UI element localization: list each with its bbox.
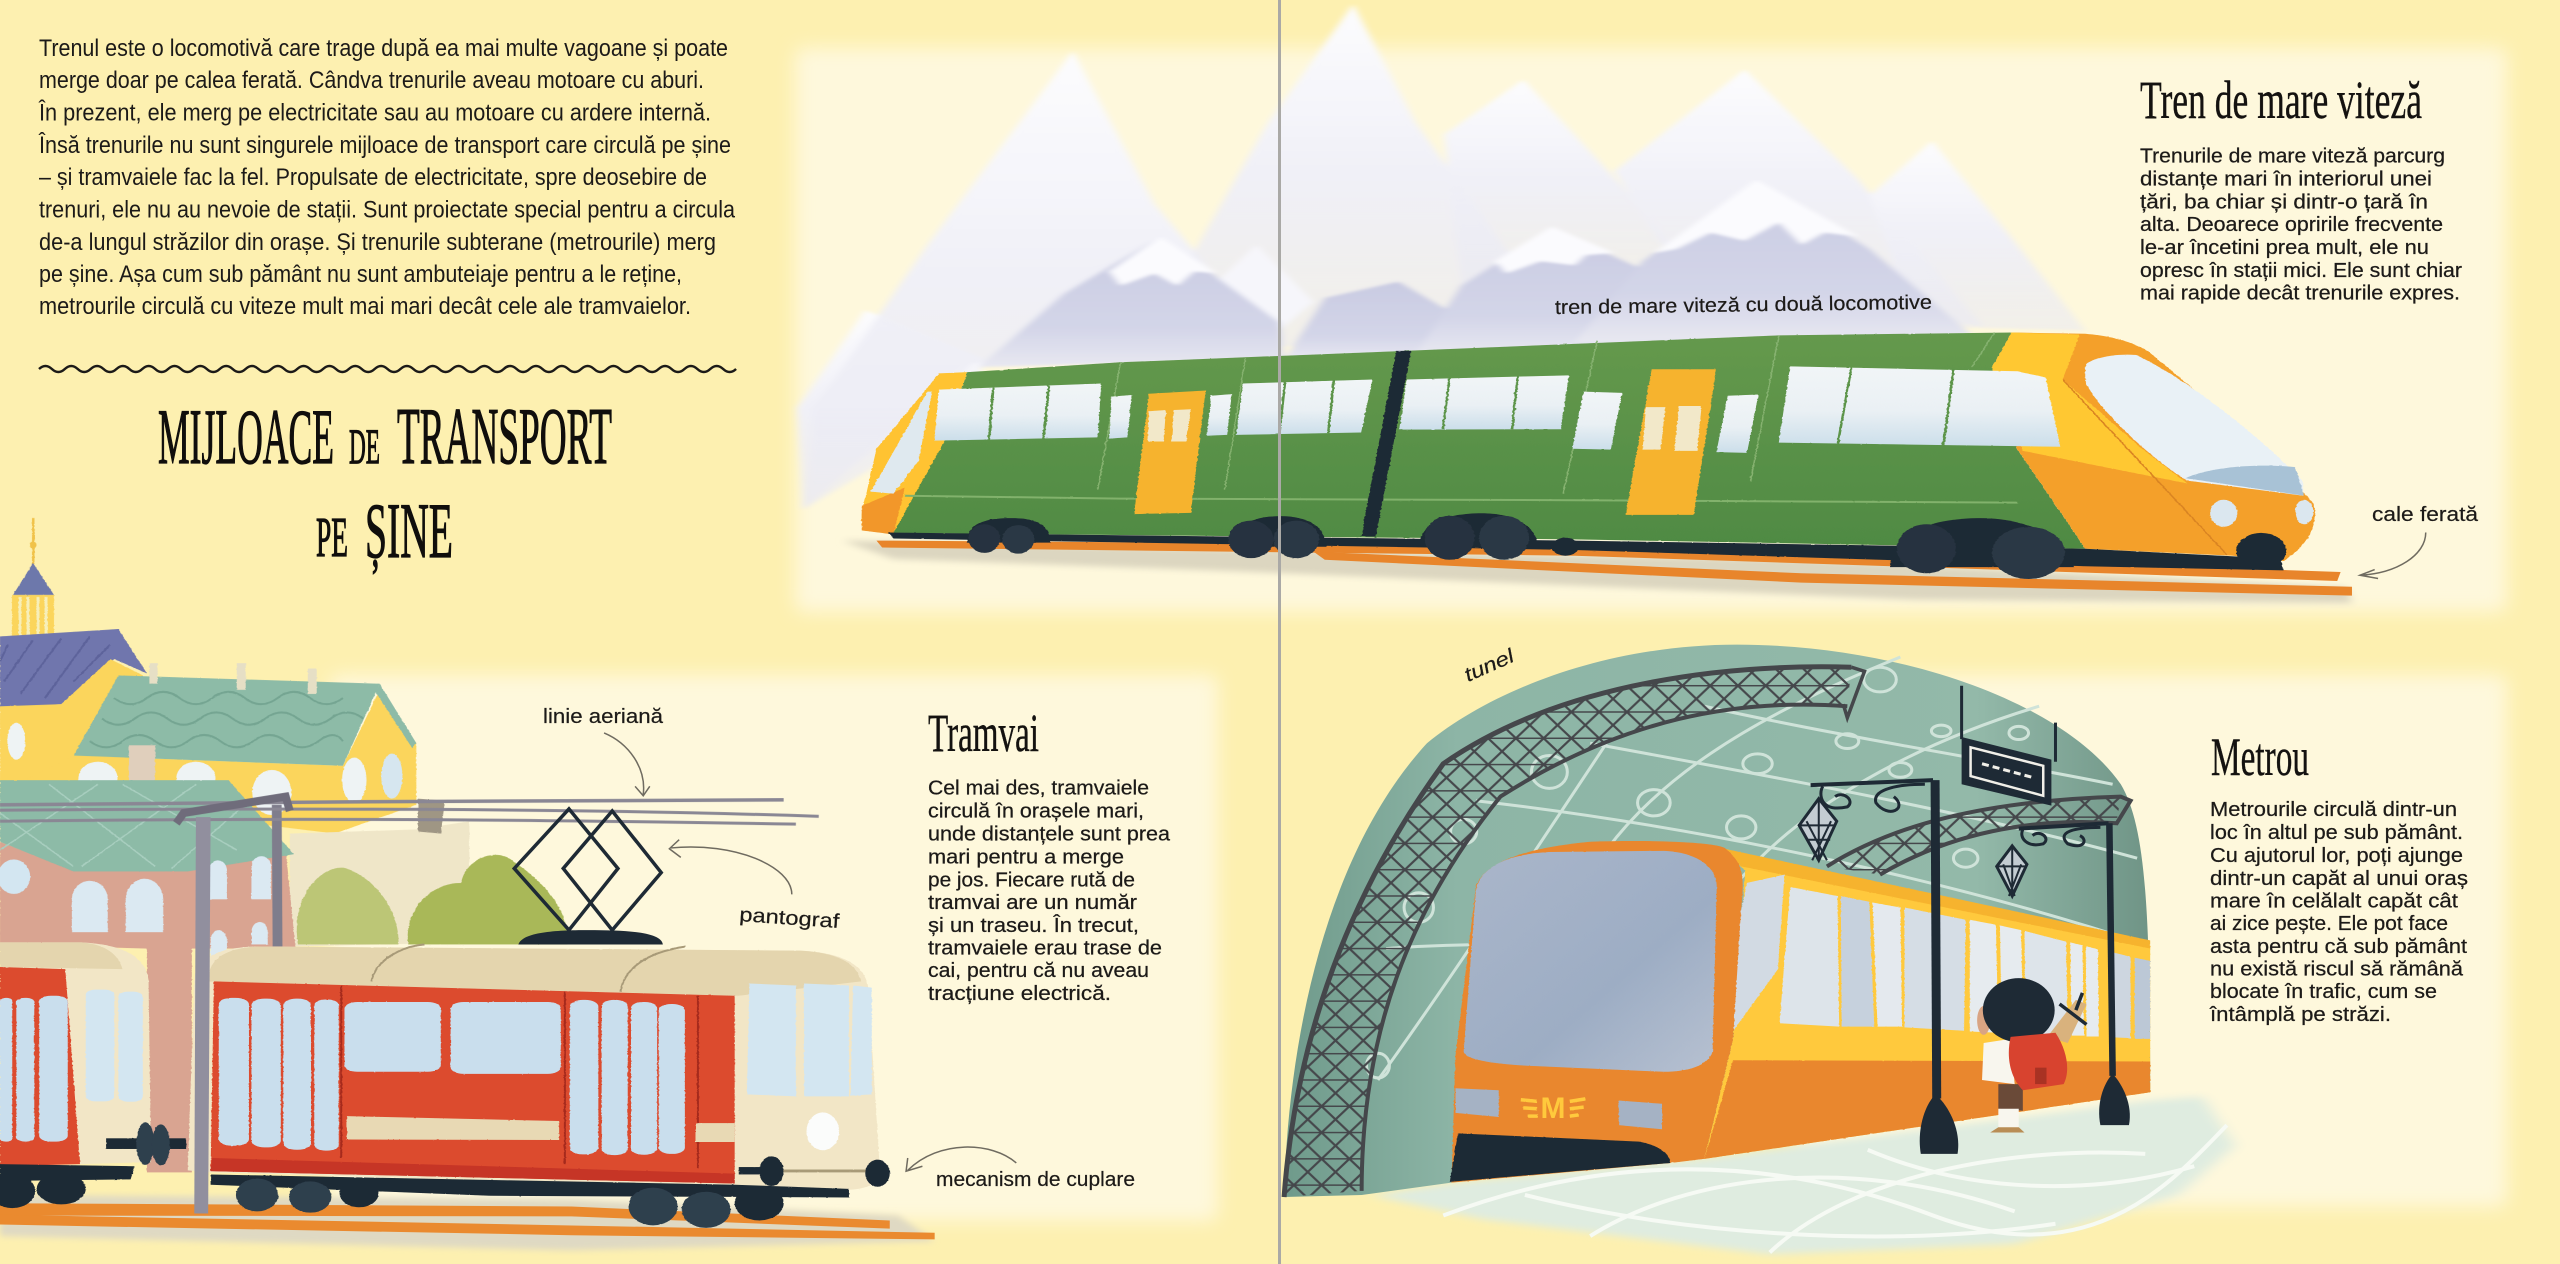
chimneys bbox=[149, 663, 158, 684]
intro text: pe șine. Așa cum sub pământ nu sunt ambuteiaje pentru a le reține, bbox=[39, 261, 682, 288]
label: railway: cale ferată bbox=[2372, 504, 2479, 526]
text: high speed train: Trenurile de mare viteză parcurg bbox=[2140, 146, 2445, 168]
text: high speed train: țări, ba chiar și dintr-o țară în bbox=[2140, 192, 2428, 214]
metro logo: M bbox=[1540, 1092, 1566, 1125]
title: DE bbox=[349, 418, 380, 474]
tunnel bbox=[1284, 645, 2150, 1197]
text: high speed train: distanțe mari în interiorul unei bbox=[2140, 168, 2432, 190]
label: pantograph: pantograf bbox=[739, 904, 840, 933]
ground and rails bbox=[0, 1195, 935, 1250]
tower bbox=[12, 518, 54, 643]
train body bbox=[862, 333, 2315, 579]
text: metro: blocate în trafic, cum se bbox=[2210, 981, 2437, 1003]
doors bbox=[1134, 390, 1206, 514]
label: two locomotive train: tren de mare viteză cu două locomotive bbox=[1555, 292, 1932, 319]
text: tram bbox=[928, 778, 1171, 1005]
intro text: Trenul este o locomotivă care trage după ea mai multe vagoane și poate bbox=[39, 35, 728, 62]
text: high speed train: le-ar încetini prea mult, ele nu bbox=[2140, 237, 2429, 259]
text: tram: unde distanțele sunt prea bbox=[928, 824, 1171, 846]
book spine bbox=[1278, 0, 1281, 1264]
metro train bbox=[1450, 841, 2150, 1183]
text: metro bbox=[2209, 799, 2468, 1026]
title bbox=[158, 393, 612, 575]
text: metro: nu există riscul să rămână bbox=[2210, 958, 2464, 980]
text: high speed train: mai rapide decât trenurile expres. bbox=[2140, 282, 2460, 304]
text: tram: tramvai are un număr bbox=[928, 892, 1137, 914]
illustration: town buildings bbox=[0, 518, 568, 1172]
arrow: coupling bbox=[906, 1147, 1016, 1171]
text: TRANSPORT bbox=[397, 393, 612, 481]
windows bbox=[934, 384, 1101, 441]
arrow: railway bbox=[2360, 532, 2426, 579]
platform bbox=[1370, 1096, 2235, 1255]
title: ȘINE bbox=[365, 487, 453, 575]
headlights bbox=[2210, 500, 2237, 527]
label: coupling: mecanism de cuplare bbox=[936, 1169, 1135, 1191]
illustration: metro station bbox=[1284, 645, 2235, 1255]
intro text: Însă trenurile nu sunt singurele mijloace de transport care circulă pe șine bbox=[38, 132, 731, 159]
tunnel wall pattern bbox=[1367, 657, 2145, 1080]
text: tram: pe jos. Fiecare rută de bbox=[928, 870, 1135, 892]
intro text: – și tramvaiele fac la fel. Propulsate de electricitate, spre deosebire de bbox=[39, 164, 707, 191]
street pole bbox=[194, 817, 211, 1213]
girl with backpack bbox=[1977, 978, 2087, 1133]
text: tram: tramvaiele erau trase de bbox=[928, 938, 1162, 960]
bushes bbox=[297, 868, 398, 944]
text: tram: și un traseu. În trecut, bbox=[928, 914, 1139, 937]
intro text: metrourile circulă cu viteze mult mai mari decât cele ale tramvaielor. bbox=[39, 293, 691, 320]
intro text: trenuri, ele nu au nevoie de stații. Sunt proiectate special pentru a circula bbox=[39, 196, 736, 224]
text: tram: mari pentru a merge bbox=[928, 846, 1124, 868]
intro text: În prezent, ele merg pe electricitate sau au motoare cu ardere internă. bbox=[38, 100, 711, 126]
text: metro: mare în celălalt capăt cât bbox=[2210, 890, 2458, 912]
blue roof house bbox=[0, 629, 147, 708]
illustration: overhead line and poles bbox=[0, 797, 819, 947]
arrow: overhead line bbox=[604, 733, 650, 796]
illustration: high speed train bbox=[842, 333, 2426, 603]
panel: metro bbox=[1800, 675, 2507, 1207]
pantograph bbox=[514, 809, 663, 944]
text: tram: circulă în orașele mari, bbox=[928, 800, 1144, 822]
heading: tram: Tramvai bbox=[928, 703, 1039, 763]
arch girders bbox=[1284, 667, 2131, 1197]
bogies bbox=[967, 518, 1050, 543]
text: metro: asta pentru că sub pământ bbox=[2210, 936, 2467, 958]
text: high speed train bbox=[2140, 146, 2462, 304]
pink building bbox=[0, 842, 296, 1172]
text: metro: dintr-un capăt al unui oraș bbox=[2210, 868, 2468, 890]
stone wall bbox=[290, 821, 469, 947]
heading: metro: Metrou bbox=[2211, 727, 2309, 787]
text: metro: întâmplă pe străzi. bbox=[2209, 1004, 2391, 1026]
text: high speed train: opresc în stații mici. Ele sunt chiar bbox=[2140, 260, 2462, 282]
label: tunnel: tunel bbox=[1461, 645, 1518, 687]
left tram bbox=[0, 942, 186, 1208]
intro text: merge doar pe calea ferată. Cândva trenurile aveau motoare cu aburi. bbox=[39, 67, 704, 94]
lamp posts bbox=[1799, 780, 2130, 1154]
green roof house bbox=[0, 690, 416, 834]
arrow: pantograph bbox=[669, 840, 792, 894]
text: metro: loc în altul pe sub pământ. bbox=[2210, 822, 2463, 844]
illustration: tram bbox=[0, 733, 1016, 1250]
heading: high speed train: Tren de mare viteză bbox=[2140, 70, 2422, 130]
title: PE bbox=[316, 507, 348, 569]
ground and rails bbox=[842, 541, 2352, 603]
label: overhead line: linie aeriană bbox=[543, 706, 664, 728]
right tram bbox=[188, 944, 890, 1228]
text: tram: Cel mai des, tramvaiele bbox=[928, 778, 1149, 800]
text: tram: tracțiune electrică. bbox=[928, 983, 1111, 1005]
text: metro: Metrourile circulă dintr-un bbox=[2210, 799, 2457, 821]
station sign bbox=[1962, 686, 2055, 806]
panel: high speed train bbox=[795, 48, 2507, 612]
intro text bbox=[38, 35, 736, 320]
text: high speed train: alta. Deoarece opririle frecvente bbox=[2140, 214, 2443, 236]
articulation bbox=[1361, 351, 1411, 537]
text: tram: cai, pentru că nu aveau bbox=[928, 960, 1149, 982]
intro text: de-a lungul străzilor din orașe. Și trenurile subterane (metrourile) merg bbox=[39, 229, 716, 256]
text: metro: ai zice pește. Ele pot face bbox=[2210, 913, 2448, 935]
panel: tram bbox=[330, 675, 1218, 1221]
illustration: mountains bbox=[797, 4, 2085, 510]
title: MIJLOACE bbox=[158, 393, 334, 480]
text: metro: Cu ajutorul lor, poți ajunge bbox=[2210, 845, 2463, 867]
